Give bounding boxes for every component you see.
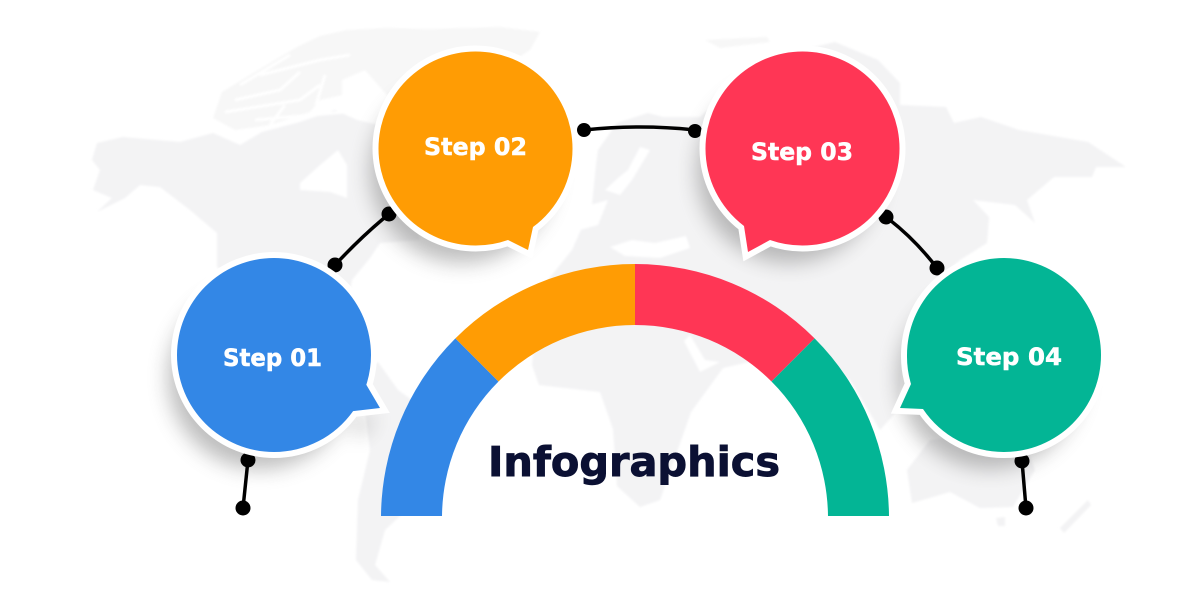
arc segment: orange: [455, 264, 635, 382]
arc segment: blue: [381, 338, 498, 518]
map: hudson bay: [300, 150, 347, 198]
map: arctic ice fragments: [705, 37, 770, 48]
bubble: step 02: [378, 52, 573, 250]
bubble drop shadows: [168, 79, 1082, 469]
bubble: step 01: [177, 258, 380, 452]
map: australia: [907, 430, 1035, 508]
map: baltic sea: [605, 147, 650, 195]
bubble: step 04: [900, 258, 1101, 452]
map: north atlantic islands: [580, 200, 608, 230]
connector: step 01 to step 02: [328, 206, 396, 272]
title: Infographics: [488, 438, 780, 486]
label: step 04: Step 04: [956, 343, 1062, 371]
map: red sea: [684, 335, 720, 372]
connector: step 03 to step 04: [878, 210, 944, 276]
arc segment: green: [772, 338, 889, 518]
map: north america: [92, 110, 420, 330]
label: step 02: Step 02: [424, 133, 527, 161]
bubble: step 03: [705, 52, 900, 252]
connector: step 04 lower: [1014, 454, 1034, 516]
map: eurasia and africa: [532, 42, 1126, 507]
map: mediterranean sea: [610, 236, 690, 258]
map: arctic islands and greenland: [213, 27, 540, 130]
map: tasmania: [996, 517, 1005, 526]
map: new zealand: [1060, 500, 1091, 533]
map: arctic channels: [225, 55, 350, 125]
semicircle gauge: [381, 264, 889, 518]
label: step 03: Step 03: [751, 138, 853, 166]
label: step 01: Step 01: [223, 344, 322, 372]
connector: step 02 to step 03: [577, 123, 702, 138]
connector: step 01 lower: [236, 452, 256, 516]
map: south america: [356, 362, 440, 582]
arc segment: red: [635, 264, 815, 382]
world map background: [92, 27, 1126, 582]
